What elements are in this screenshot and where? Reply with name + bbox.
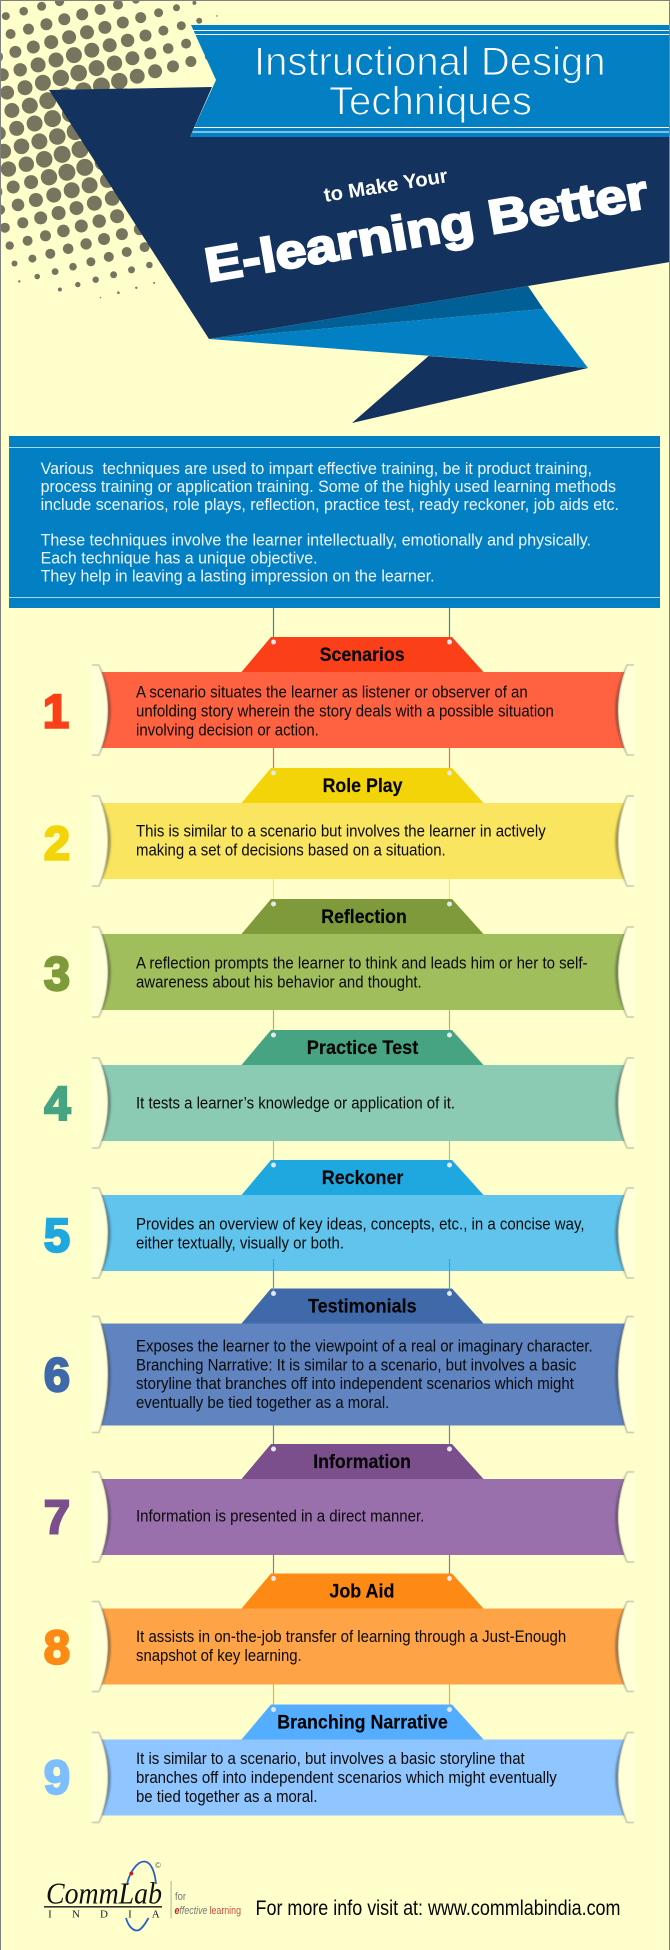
connector lines xyxy=(274,1259,450,1294)
number: 4 xyxy=(44,1076,71,1130)
heading: Practice Test xyxy=(307,1037,419,1059)
heading: Reflection xyxy=(321,906,407,928)
intro text: They help in leaving a lasting impression on the learner. xyxy=(41,568,435,586)
banner stripes xyxy=(192,30,670,132)
right bracket xyxy=(616,796,635,886)
right bracket xyxy=(616,1602,635,1692)
card 4: Practice Test xyxy=(44,1010,635,1148)
title line 2: Techniques xyxy=(329,80,532,124)
card 2: Role Play xyxy=(44,748,635,886)
logo divider xyxy=(170,1881,172,1918)
left bracket xyxy=(91,1316,110,1432)
tab xyxy=(242,1574,484,1608)
card 3: Reflection xyxy=(44,879,635,1017)
heading: Job Aid xyxy=(329,1580,394,1602)
left bracket xyxy=(91,1188,110,1278)
registered mark: © xyxy=(155,1861,161,1870)
navy ribbon body xyxy=(49,87,670,339)
number: 1 xyxy=(43,684,69,738)
logo rule xyxy=(44,1906,162,1908)
connector lines xyxy=(274,1555,450,1578)
logo tagline: for xyxy=(175,1891,186,1903)
tab xyxy=(242,768,484,803)
tab xyxy=(242,1160,484,1195)
intro stripes xyxy=(9,448,660,598)
description: This is similar to a scenario but involves the learner in actively xyxy=(136,823,546,841)
left bracket xyxy=(91,1602,110,1692)
description: involving decision or action. xyxy=(136,722,319,740)
number: 5 xyxy=(44,1208,70,1262)
description: snapshot of key learning. xyxy=(136,1647,302,1665)
description: A scenario situates the learner as listener or observer of an xyxy=(136,684,528,702)
title line 1: Instructional Design xyxy=(254,40,606,84)
intro text: include scenarios, role plays, reflection, practice test, ready reckoner, job aids etc. xyxy=(41,496,619,514)
logo tagline: learning xyxy=(210,1905,241,1917)
card 6: Testimonials xyxy=(44,1259,635,1432)
connector dots xyxy=(271,902,452,906)
intro text: Various techniques are used to impart effective training, be it product training, xyxy=(41,460,592,478)
card 7: Information xyxy=(44,1425,635,1562)
tab xyxy=(242,1704,484,1740)
left bracket xyxy=(91,1472,110,1562)
number: 2 xyxy=(44,816,70,870)
connector dots xyxy=(271,1291,452,1296)
right bracket xyxy=(616,1058,635,1148)
footer link text: For more info visit at: www.commlabindia.com xyxy=(256,1897,620,1920)
tab xyxy=(242,1444,484,1479)
number: 6 xyxy=(44,1348,70,1401)
description: awareness about his behavior and thought. xyxy=(136,973,422,991)
tab xyxy=(242,1288,484,1324)
card 5: Reckoner xyxy=(44,1141,635,1278)
heading: Testimonials xyxy=(308,1296,417,1318)
description: eventually be tied together as a moral. xyxy=(136,1394,389,1412)
number: 9 xyxy=(44,1750,70,1804)
blue fold xyxy=(209,309,588,368)
logo wordmark: CommLab xyxy=(46,1875,162,1910)
right bracket xyxy=(616,1732,635,1822)
footer logo: CommLab India xyxy=(44,1861,241,1930)
panel: introduction xyxy=(9,436,660,608)
description: branches off into independent scenarios which might eventually xyxy=(136,1769,557,1787)
top blue banner xyxy=(190,25,670,137)
connector lines xyxy=(274,1141,450,1165)
right bracket xyxy=(616,1188,635,1278)
description xyxy=(136,1337,593,1412)
description: A reflection prompts the learner to think and leads him or her to self- xyxy=(136,954,588,972)
heading: Reckoner xyxy=(322,1167,404,1189)
left bracket xyxy=(91,927,110,1017)
number: 7 xyxy=(44,1490,70,1544)
intro text xyxy=(41,460,619,586)
subtitle: to Make Your xyxy=(322,165,449,207)
lower navy tail xyxy=(352,356,588,423)
left bracket xyxy=(91,665,110,755)
description: either textually, visually or both. xyxy=(136,1234,344,1252)
number: 3 xyxy=(44,947,70,1000)
logo India: A xyxy=(152,1909,160,1921)
intro background xyxy=(9,436,660,608)
logo red dot xyxy=(129,1872,133,1875)
connector dots xyxy=(271,770,452,776)
halftone dot pattern xyxy=(0,0,218,298)
description xyxy=(136,684,554,740)
band xyxy=(98,1608,628,1684)
tab xyxy=(242,899,484,934)
right bracket xyxy=(616,1316,635,1432)
description xyxy=(136,1215,584,1252)
band xyxy=(98,1195,628,1271)
description: Branching Narrative: It is similar to a scenario, but involves a basic xyxy=(136,1356,576,1374)
intro text: These techniques involve the learner intellectually, emotionally and physically. xyxy=(41,532,591,550)
description: Information is presented in a direct manner. xyxy=(136,1508,424,1526)
logo India xyxy=(48,1909,160,1921)
tab xyxy=(242,1030,484,1065)
dark blue fold xyxy=(209,286,544,339)
band xyxy=(98,1479,628,1555)
number: 8 xyxy=(44,1620,70,1674)
description xyxy=(136,1628,566,1665)
band xyxy=(98,672,628,748)
description: It tests a learner’s knowledge or application of it. xyxy=(136,1094,455,1112)
heading: Information xyxy=(313,1451,411,1473)
logo tagline: effective xyxy=(174,1905,208,1917)
description xyxy=(136,1750,557,1806)
description: Provides an overview of key ideas, concepts, etc., in a concise way, xyxy=(136,1215,584,1233)
tab xyxy=(242,637,484,672)
connector lines xyxy=(274,1684,450,1710)
band xyxy=(98,803,628,879)
description xyxy=(136,823,546,860)
band xyxy=(98,934,628,1010)
title ribbon xyxy=(49,25,670,423)
connector lines xyxy=(274,748,450,773)
right bracket xyxy=(616,927,635,1017)
intro text: Each technique has a unique objective. xyxy=(41,550,317,568)
logo India: I xyxy=(48,1909,52,1921)
band xyxy=(98,1740,628,1816)
card 1: Scenarios xyxy=(43,608,635,755)
description xyxy=(136,954,588,991)
description: unfolding story wherein the story deals with a possible situation xyxy=(136,702,554,720)
description: storyline that branches off into independent scenarios which might xyxy=(136,1375,574,1393)
description: be tied together as a moral. xyxy=(136,1788,318,1806)
left bracket xyxy=(91,796,110,886)
connector dots xyxy=(271,1162,452,1168)
connector dots xyxy=(271,1707,452,1712)
logo India: N xyxy=(72,1909,80,1921)
connector lines xyxy=(274,1010,450,1035)
intro text: process training or application training. Some of the highly used learning methods xyxy=(41,478,616,496)
connector dots xyxy=(271,1032,452,1038)
logo tagline xyxy=(174,1891,241,1917)
description: It is similar to a scenario, but involves a basic storyline that xyxy=(136,1750,525,1768)
connector dots xyxy=(271,640,452,644)
description: It assists in on-the-job transfer of learning through a Just-Enough xyxy=(136,1628,566,1646)
logo orbit xyxy=(126,1862,156,1930)
left bracket xyxy=(91,1058,110,1148)
subtitle large: E-learning Better xyxy=(201,166,652,293)
description: making a set of decisions based on a situation. xyxy=(136,842,446,860)
connector lines xyxy=(274,879,450,904)
logo India: D xyxy=(100,1909,108,1921)
right bracket xyxy=(616,1472,635,1562)
heading: Role Play xyxy=(323,775,403,797)
left bracket xyxy=(91,1732,110,1822)
connector dots xyxy=(271,1446,452,1452)
heading: Scenarios xyxy=(320,644,405,666)
connector lines xyxy=(274,1425,450,1449)
connector lines xyxy=(274,608,450,642)
card 8: Job Aid xyxy=(44,1555,635,1692)
connector dots xyxy=(271,1576,452,1581)
description: Exposes the learner to the viewpoint of a real or imaginary character. xyxy=(136,1337,593,1355)
logo India: I xyxy=(128,1909,132,1921)
card 9: Branching Narrative xyxy=(44,1684,635,1822)
heading: Branching Narrative xyxy=(277,1712,448,1734)
right bracket xyxy=(616,665,635,755)
band xyxy=(98,1324,628,1426)
band xyxy=(98,1065,628,1141)
